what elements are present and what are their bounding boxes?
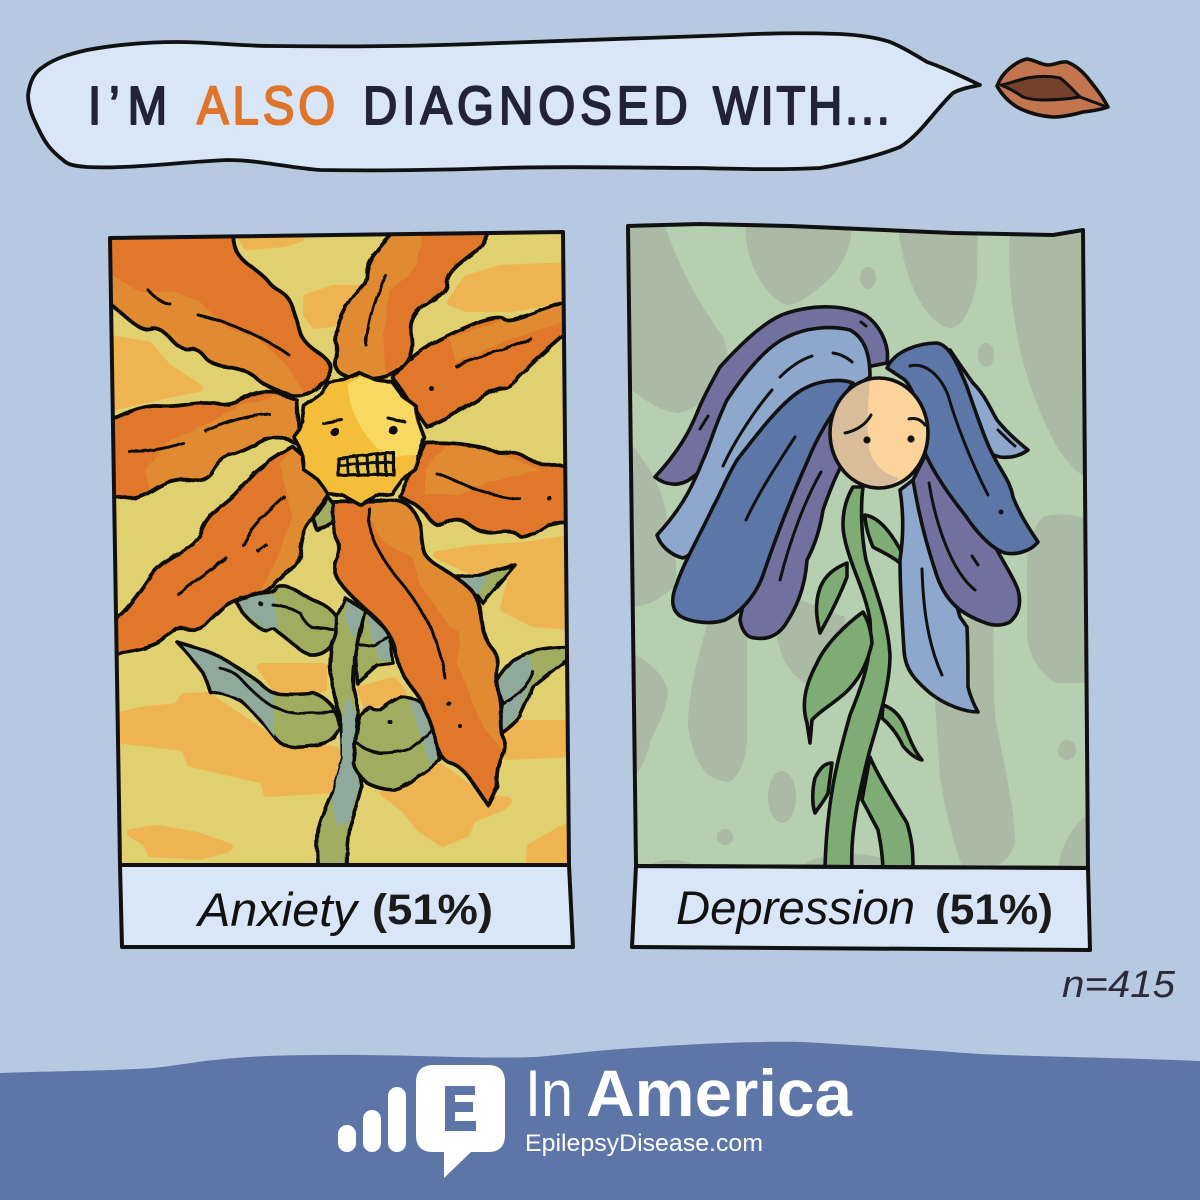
leaf: small under face xyxy=(313,497,342,530)
face: sad flower head xyxy=(830,378,928,488)
leaf: stem upper right xyxy=(865,515,902,563)
leaf: far right xyxy=(495,647,567,733)
petal: right purple xyxy=(913,450,1020,625)
title text xyxy=(88,75,890,136)
footer band xyxy=(0,1042,1200,1200)
logo: bars and speech bubble xyxy=(338,1065,505,1178)
leaf: stem right xyxy=(882,705,922,760)
petal: upper left xyxy=(100,232,331,410)
caption label: (51%) xyxy=(935,886,1053,934)
petal: lower left xyxy=(118,444,329,656)
logo wordmark: In xyxy=(525,1056,573,1130)
petal: left light blue xyxy=(657,328,870,558)
caption label: Anxiety xyxy=(195,883,360,936)
eyebrows and eyes xyxy=(323,418,405,423)
orange background patches xyxy=(108,238,572,868)
stem: twisted strands xyxy=(825,487,913,868)
petal: lower right light blue xyxy=(900,480,978,712)
panel frame xyxy=(110,232,569,865)
leaf: stem upper left xyxy=(817,563,847,633)
leaf: behind stem right xyxy=(355,610,393,683)
caption box: depression xyxy=(632,866,1090,950)
leaf: long left xyxy=(177,642,340,747)
logo wordmark: America xyxy=(586,1056,853,1130)
petal: top purple xyxy=(655,307,888,484)
petal: lower left purple xyxy=(740,417,845,638)
petal: top xyxy=(330,230,490,385)
panel: depression xyxy=(625,220,1095,950)
caption label xyxy=(676,881,1053,934)
caption box: anxiety xyxy=(120,865,573,947)
caption label: Depression xyxy=(676,881,915,934)
depression illustration xyxy=(625,220,1095,890)
face: anxious sun xyxy=(295,373,425,505)
panel frame xyxy=(628,224,1088,868)
petal: upper right xyxy=(393,298,572,427)
stem: anxiety flower xyxy=(317,598,365,868)
leaf: stem lower left xyxy=(813,763,832,813)
panel: anxiety xyxy=(100,228,575,947)
leaf: lower right xyxy=(353,697,440,790)
title text: ALSO xyxy=(197,75,335,136)
petal: right back light blue xyxy=(950,350,1028,457)
green background blobs xyxy=(628,222,1095,890)
icon: lips xyxy=(997,59,1108,117)
eyebrows and eyes xyxy=(845,415,925,433)
bubble shape xyxy=(28,33,980,170)
title text: WITH... xyxy=(713,75,890,136)
title text: I’M xyxy=(88,75,167,136)
logo wordmark: EpilepsyDisease.com xyxy=(525,1130,763,1157)
petal: left front blue xyxy=(673,380,853,623)
sample size note: n=415 xyxy=(1062,964,1176,1006)
petal: left xyxy=(105,390,305,498)
petal: right xyxy=(400,443,572,537)
leaf: top right xyxy=(453,565,515,603)
logo wordmark xyxy=(525,1056,853,1157)
caption label xyxy=(195,883,493,936)
title text: DIAGNOSED xyxy=(363,75,688,136)
petal: lower right long xyxy=(333,495,510,805)
caption label: (51%) xyxy=(372,886,493,934)
gritted teeth xyxy=(338,452,393,475)
petal: right blue xyxy=(887,343,1038,554)
leaf: stem middle left xyxy=(804,612,872,743)
anxiety illustration xyxy=(100,228,575,868)
speech bubble heading xyxy=(28,33,980,170)
leaf: upper left xyxy=(235,586,337,655)
